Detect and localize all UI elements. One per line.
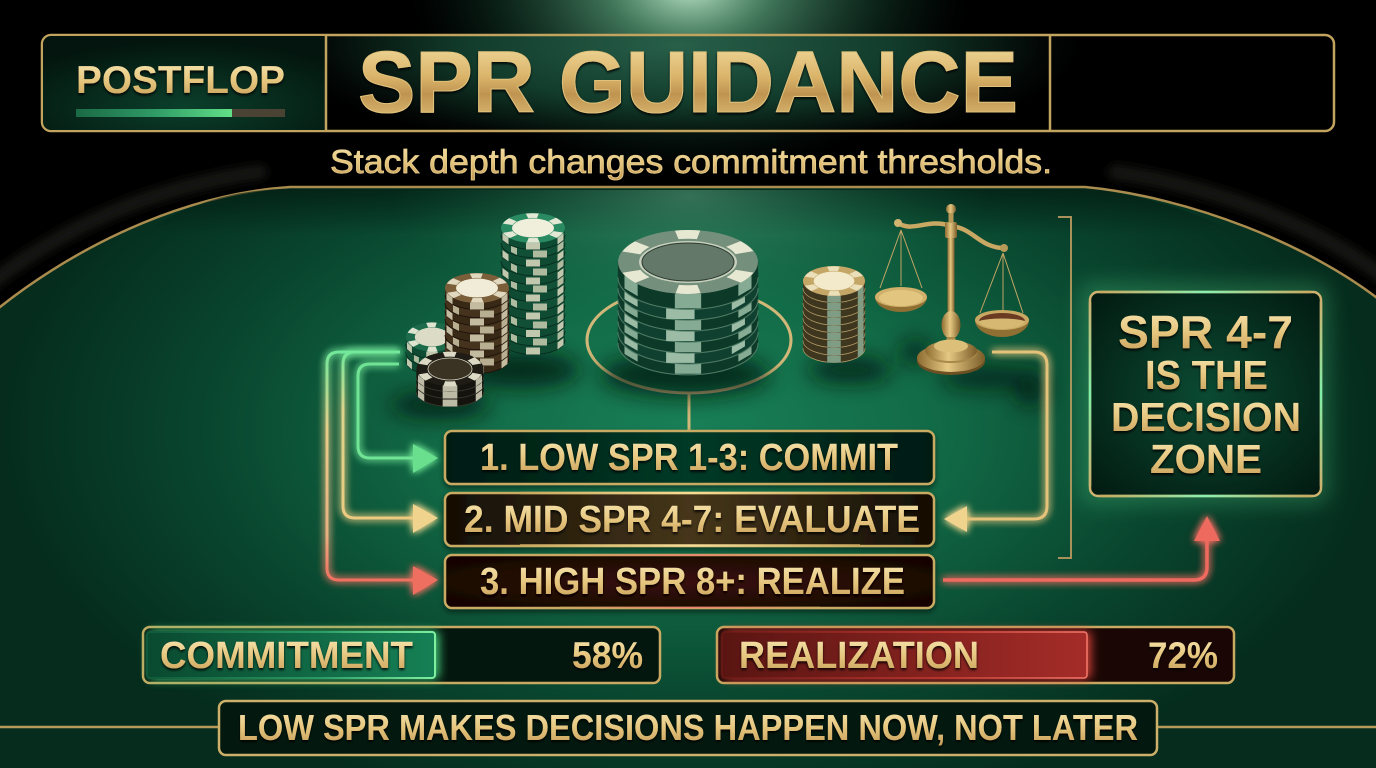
right tan stack — [803, 266, 865, 362]
callout text: DECISION — [1111, 394, 1301, 440]
table rim — [0, 172, 1376, 284]
postflop label: POSTFLOP — [76, 59, 285, 102]
spotlight — [380, 0, 1000, 190]
header dividers — [326, 35, 1050, 131]
header bar — [42, 34, 1334, 131]
step 1 text: 1. LOW SPR 1-3: COMMIT — [480, 437, 898, 479]
dark front stack — [416, 352, 484, 406]
callout text: ZONE — [1150, 436, 1262, 482]
postflop panel — [43, 36, 326, 130]
callout text: SPR 4-7 — [1118, 306, 1293, 358]
footer text: LOW SPR MAKES DECISIONS HAPPEN NOW, NOT LATER — [238, 707, 1138, 748]
left pan — [875, 287, 927, 312]
commitment fill — [147, 632, 435, 678]
callout — [1080, 282, 1330, 505]
footer banner — [219, 701, 1157, 755]
footer rule — [0, 726, 1376, 728]
callout text: IS THE — [1145, 352, 1268, 398]
big centre stack — [618, 230, 758, 375]
realization value: 72% — [1148, 635, 1218, 676]
step 1 box — [445, 431, 934, 484]
arrow: gold from scale to mid SPR — [944, 352, 1047, 532]
arrow: green to low SPR — [358, 364, 438, 473]
table ring — [587, 287, 791, 430]
arrow: gold to mid SPR — [343, 352, 438, 533]
commitment meter — [143, 627, 660, 683]
beam — [898, 223, 1004, 248]
step 2 text: 2. MID SPR 4-7: EVALUATE — [464, 499, 920, 541]
step 3 text: 3. HIGH SPR 8+: REALIZE — [480, 561, 905, 603]
chip stacks group — [390, 213, 1046, 430]
commitment label: COMMITMENT — [160, 635, 413, 677]
tall green stack — [501, 213, 565, 354]
right pan — [975, 310, 1029, 337]
step 3 box — [445, 555, 934, 608]
bracket — [1058, 217, 1071, 558]
realization fill — [722, 632, 1087, 678]
title: SPR GUIDANCE — [358, 34, 1018, 131]
postflop progress bar — [76, 109, 285, 117]
realization meter — [717, 627, 1234, 683]
commitment value: 58% — [572, 635, 643, 676]
brown stack — [445, 273, 509, 374]
base — [917, 340, 985, 375]
step 2 box — [445, 493, 934, 546]
arrow: red to callout — [943, 516, 1220, 580]
icon: balance scale — [875, 204, 1029, 375]
callout text — [1111, 306, 1301, 482]
realization label: REALIZATION — [739, 635, 979, 677]
subtitle: Stack depth changes commitment thresholds. — [330, 143, 1052, 180]
small green stack — [406, 322, 458, 374]
chip shadows — [390, 340, 1046, 419]
felt table — [0, 187, 1376, 768]
arrow: red to high SPR — [327, 352, 438, 595]
scale chains — [880, 230, 1023, 313]
post — [948, 232, 954, 317]
